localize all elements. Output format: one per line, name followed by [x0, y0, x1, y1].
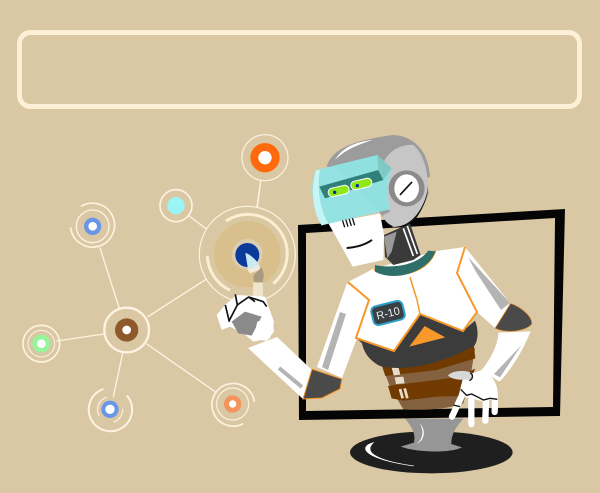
monitor screen frame: [298, 209, 565, 420]
raised hand touching node: [217, 294, 274, 342]
node: central brown hub: [104, 308, 149, 352]
arm on left, reaching to network: [248, 283, 369, 399]
node: top-left blue: [71, 203, 115, 247]
robot: [217, 135, 565, 473]
arm on right: [457, 247, 510, 328]
side plate: [383, 145, 428, 227]
monitor stand and base: [350, 419, 513, 473]
chest plates: [348, 247, 477, 351]
connector to top node: [257, 181, 261, 207]
empty title panel: [20, 32, 580, 106]
network diagram: [23, 135, 295, 431]
node: cyan: [160, 190, 192, 222]
ear dial: [389, 170, 425, 206]
face: [328, 213, 384, 267]
helmet: [327, 135, 430, 227]
node: bottom blue: [89, 389, 132, 431]
neck: [384, 223, 421, 265]
eyes: [327, 184, 350, 198]
node: left green: [23, 325, 60, 362]
connector lines: [57, 190, 259, 397]
visor: [312, 155, 392, 225]
node: bottom-right orange: [212, 383, 254, 426]
chest badge R-10: [370, 300, 406, 326]
hand resting on monitor: [448, 370, 498, 424]
chest badge R-10: R-10: [375, 305, 401, 323]
torso lower and belts: [357, 314, 478, 410]
pointing finger: [245, 253, 264, 298]
robot head: [312, 135, 430, 267]
node: large active blue: [199, 206, 295, 302]
node: top orange: [242, 135, 288, 181]
